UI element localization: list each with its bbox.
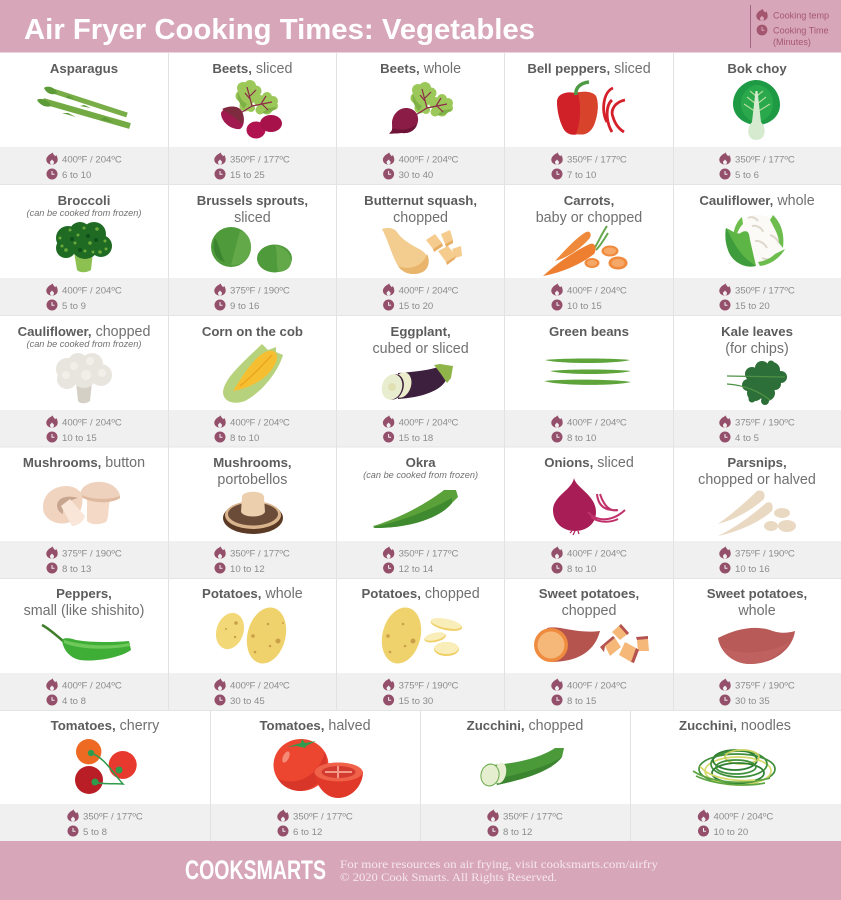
panel: Mushrooms, button [0,447,168,579]
heading: Beets, whole [380,61,461,77]
icon: whole beet [389,82,453,134]
cooking temperature: 400ºF / 204ºC [714,812,773,822]
panel: Kale leaves (for chips) [674,316,841,447]
heading: Okra [406,455,436,470]
icon: zucchini [479,748,564,788]
cooking time [383,694,433,707]
cooking time: 5 to 8 [83,827,107,838]
cooking temperature [46,283,122,296]
cooking time: 8 to 13 [62,564,91,575]
cooking temperature: 400ºF / 204ºC [567,286,627,296]
cooking time [46,300,86,312]
cooking time [214,432,259,444]
cooking temperature [383,152,458,166]
heading: Kale leaves [721,324,793,339]
panel: Peppers, small [0,579,168,710]
panel: Eggplant, cubed or sliced [337,316,504,447]
heading: Beets, sliced [212,61,293,77]
icon: corn [223,344,283,403]
subheading: cubed or sliced [373,341,469,357]
icon: carrots [543,226,628,276]
cooking temperature [551,546,627,560]
cooking time: 8 to 10 [567,433,596,444]
panel: Butternut squash, chopped [337,185,504,316]
cooking time: 9 to 16 [230,301,259,312]
icon: okra [373,490,458,528]
panel: Onions, sliced [505,447,673,579]
icon: parsnips [718,490,796,536]
cooking time [383,168,433,181]
cooking temperature [46,152,122,166]
cooking time: 30 to 40 [399,170,433,181]
cooking temperature [46,415,122,428]
cooking time: 10 to 15 [567,301,602,312]
panel: Tomatoes, halved [211,711,420,841]
icon: chopped cauliflower [56,353,112,403]
heading: Tomatoes, cherry [51,718,160,734]
cooking time [552,432,596,444]
panel: Asparagus [0,53,168,185]
cooking temperature [551,283,627,296]
cooking temperature: 400ºF / 204ºC [567,548,627,560]
note: (can be cooked from frozen) [27,339,141,349]
heading: Eggplant, [391,324,451,339]
cooking temperature: 400ºF / 204ºC [230,418,290,428]
cooking time [383,562,434,575]
cooking time [698,826,748,838]
icon: sliced beets [221,80,282,138]
cooking temperature: 350ºF / 177ºC [230,548,290,560]
cooking time: 10 to 16 [735,564,770,575]
icon: red onion [553,478,625,535]
cooking time [46,562,91,575]
cooking temperature: 400ºF / 204ºC [62,418,122,428]
cooking temperature: 400ºF / 204ºC [62,680,122,692]
cooking temperature [214,283,290,296]
footer credit text: © 2020 Cook Smarts. All Rights Reserved. [340,870,557,884]
icon: broccoli [56,222,112,272]
panel: Green beans [505,316,673,447]
cooking temperature [383,546,458,560]
cooking temperature [277,809,353,822]
heading: Green beans [549,324,629,339]
icon: eggplant [378,364,453,402]
footer credit text: For more resources on air frying, visit cooksmarts.com/airfry [340,857,658,871]
heading: Bok choy [727,61,787,76]
cooking time [383,300,433,312]
cooking time [488,826,532,838]
heading: Zucchini, noodles [679,718,791,734]
cooking time [278,826,322,838]
icon: portobello [223,492,283,534]
cooking time [68,826,107,838]
cooking temperature [551,678,627,692]
cooking time [214,562,265,575]
cooking time: 4 to 5 [735,433,759,444]
panel: Potatoes, chopped [337,579,504,710]
panel: Bell peppers, sliced [505,53,673,185]
cooking temperature: 350ºF / 177ºC [399,548,458,560]
cooking time [46,694,86,707]
legend: cooking time: (Minutes) [773,37,811,47]
cooking time: 10 to 15 [62,433,97,444]
legend [750,5,829,48]
cooking temperature [698,809,773,822]
note: (can be cooked from frozen) [27,208,141,218]
cooking temperature: 375ºF / 190ºC [230,286,290,296]
cooking temperature: 400ºF / 204ºC [230,680,290,692]
cooking time [720,168,759,181]
cooking time: 15 to 18 [399,433,433,444]
cooking temperature: 400ºF / 204ºC [62,154,122,166]
cooking time: 8 to 15 [567,696,596,707]
header banner [0,0,841,52]
icon: button mushrooms [43,482,120,526]
cooking temperature [719,415,795,428]
heading: Mushrooms, button [23,455,145,471]
cooking time: 30 to 45 [230,696,265,707]
cooking time: 8 to 10 [567,564,596,575]
heading: Cauliflower, whole [699,193,815,209]
panel: Sweet potatoes, whole [674,579,841,710]
title: Air Fryer Cooking Times: Vegetables [24,14,535,46]
heading: Broccoli [58,193,110,208]
cooking temperature: 350ºF / 177ºC [735,286,795,296]
cooking time: 12 to 14 [399,564,434,575]
subheading: (for chips) [725,341,789,357]
cooking temperature [719,283,795,296]
cooking time [720,694,770,707]
cooking temperature: 350ºF / 177ºC [567,154,627,166]
cooking temperature [719,678,795,692]
cooking temperature: 375ºF / 190ºC [735,680,795,692]
cooking temperature [67,809,143,822]
cooking time: 7 to 10 [567,170,596,181]
icon: green beans [544,358,631,385]
logo: Cook Smarts: COOKSMARTS [185,855,326,885]
cooking time [720,562,770,575]
heading: Potatoes, whole [202,586,303,602]
panel: Beets, sliced [169,53,336,185]
panel: Beets, whole [337,53,504,185]
heading: Cauliflower, chopped [18,324,150,340]
cooking time: 6 to 10 [62,170,91,181]
cooking temperature: 375ºF / 190ºC [735,418,795,428]
heading: Peppers, [56,586,112,601]
cooking temperature: 350ºF / 177ºC [503,812,563,822]
heading: Tomatoes, halved [259,718,371,734]
icon: zucchini noodles [693,750,775,785]
legend: cooking time [757,25,829,47]
cooking time: 8 to 10 [230,433,259,444]
cooking temperature [214,152,290,166]
legend: cooking time: Cooking Time [773,26,829,36]
panel: Bok choy [674,53,841,185]
cooking time [552,300,602,312]
cooking time: 5 to 6 [735,170,759,181]
cooking temperature [487,809,563,822]
footer credit text [340,857,658,884]
legend: cooking temp: Cooking temp [773,10,829,20]
cooking temperature [46,546,122,560]
cooking time: 6 to 12 [293,827,322,838]
cooking time: 15 to 25 [230,170,265,181]
icon: whole cauliflower [725,215,785,267]
panel: Potatoes, whole [169,579,336,710]
subheading: chopped or halved [698,472,816,488]
panel: Okra [337,447,504,579]
cooking temperature [719,546,795,560]
cooking temperature: 375ºF / 190ºC [62,548,122,560]
cooking time [552,168,596,181]
panel: Broccoli [0,185,168,316]
cooking temperature [214,546,290,560]
cooking time [383,432,433,444]
heading: Corn on the cob [202,324,303,339]
subheading: chopped [393,210,448,226]
cooking time [720,432,759,444]
cooking time [46,168,91,181]
cooking time [552,562,596,575]
icon: bok choy [733,80,780,140]
panel: Zucchini, chopped [421,711,630,841]
cooking time: 10 to 20 [714,827,748,838]
cooking temperature: 400ºF / 204ºC [567,680,627,692]
cooking time: 15 to 20 [399,301,433,312]
cooking temperature: 400ºF / 204ºC [567,418,627,428]
subheading: portobellos [217,472,287,488]
heading: Carrots, [564,193,614,208]
subheading: baby or chopped [536,210,642,226]
cooking time [214,300,259,312]
heading: Asparagus [50,61,118,76]
heading: Onions, sliced [544,455,634,471]
icon: whole potatoes [211,603,292,668]
panel: Corn on the cob [169,316,336,447]
icon: brussels sprouts [211,227,292,272]
cooking time: 15 to 20 [735,301,770,312]
cooking time: 10 to 12 [230,564,265,575]
subheading: whole [737,603,776,619]
heading: Bell peppers, sliced [527,61,651,77]
heading: Brussels sprouts, [197,193,308,208]
cooking temperature: 400ºF / 204ºC [399,418,458,428]
panel: Mushrooms, portobellos [169,447,336,579]
footer banner [0,841,841,900]
cooking temperature [719,152,795,166]
icon: whole sweet potato [718,628,795,664]
cooking time: 8 to 12 [503,827,532,838]
heading: Zucchini, chopped [467,718,583,734]
cooking temperature: 350ºF / 177ºC [293,812,353,822]
heading: Potatoes, chopped [362,586,480,602]
heading: Butternut squash, [364,193,477,208]
cooking temperature: 375ºF / 190ºC [399,680,458,692]
cooking temperature: 350ºF / 177ºC [230,154,290,166]
icon: shishito pepper [42,625,131,661]
icon: butternut squash [382,228,462,274]
cooking temperature: 350ºF / 177ºC [83,812,143,822]
cooking temperature: 350ºF / 177ºC [735,154,795,166]
cooking temperature [551,152,627,166]
cooking time: 15 to 30 [399,696,433,707]
icon: asparagus [37,87,130,126]
icon: bell pepper [557,82,625,135]
note: (can be cooked from frozen) [363,470,478,480]
cooking temperature: 375ºF / 190ºC [735,548,795,560]
heading: Sweet potatoes, [707,586,807,601]
cooking temperature: 400ºF / 204ºC [399,154,458,166]
panel: Sweet potatoes, chopped [505,579,673,710]
icon: chopped potatoes [376,603,463,668]
panel: Parsnips, chopped or halved [674,447,841,579]
cooking time [552,694,596,707]
cooking temperature [383,678,458,692]
cooking time: 30 to 35 [735,696,770,707]
panel: Tomatoes, cherry [0,711,210,841]
subheading: small (like shishito) [24,603,144,619]
panel: Cauliflower, chopped [0,316,168,447]
cooking time [720,300,770,312]
panel: Carrots, baby or chopped [505,185,673,316]
panel: Zucchini, noodles [631,711,841,841]
cooking temperature [551,415,627,428]
heading: Mushrooms, [213,455,292,470]
panel: Brussels sprouts, sliced [169,185,336,316]
cooking time [46,432,97,444]
icon: cherry tomatoes [75,739,137,794]
panel: Cauliflower, whole [674,185,841,316]
cooking temperature [46,678,122,692]
icon: halved tomato [274,739,363,798]
cooking time [214,168,265,181]
subheading: sliced [234,210,271,226]
heading: Parsnips, [727,455,787,470]
cooking temperature: 400ºF / 204ºC [62,286,122,296]
heading: Sweet potatoes, [539,586,639,601]
cooking temperature [214,678,290,692]
icon: kale [727,360,787,405]
cooking time [214,694,265,707]
cooking temperature [214,415,290,428]
cooking time: 4 to 8 [62,696,86,707]
cooking time: 5 to 9 [62,301,86,312]
subheading: chopped [562,603,616,619]
cooking temperature: 400ºF / 204ºC [399,286,458,296]
cooking temperature [383,415,458,428]
icon: chopped sweet potato [534,624,649,663]
cooking temperature [383,283,458,296]
